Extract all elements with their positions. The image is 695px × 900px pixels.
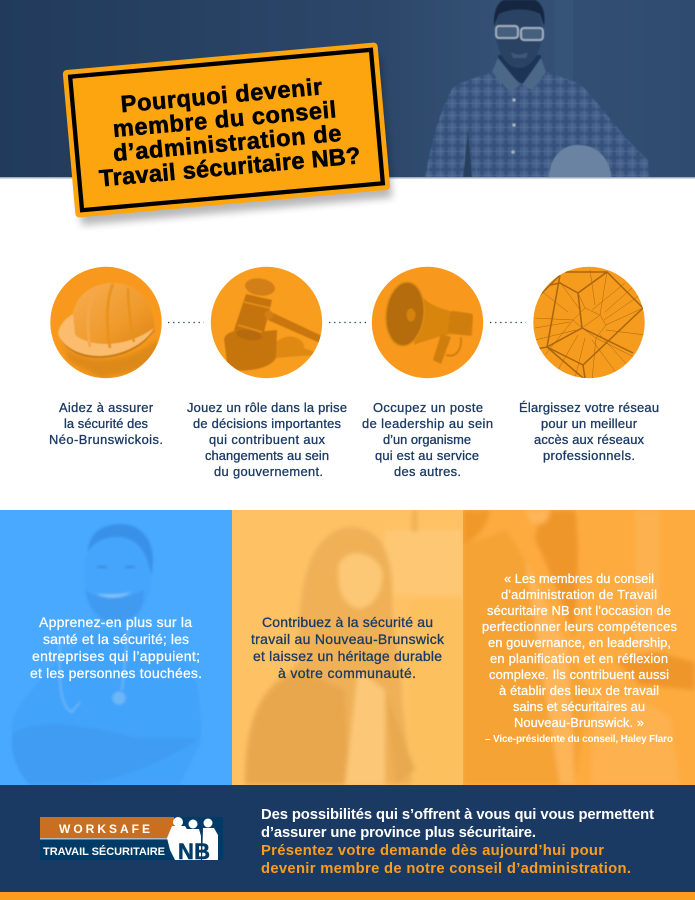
title text	[92, 71, 361, 191]
quote text: en planification et en réflexion	[490, 651, 668, 666]
quote attribution: – Vice-présidente du conseil, Haley Flaro	[485, 734, 673, 745]
quote text: d'administration de Travail	[501, 587, 657, 602]
caption 2	[187, 400, 347, 479]
panel text: santé et la sécurité; les	[43, 631, 189, 647]
caption 3	[362, 400, 493, 479]
caption 2: du gouvernement.	[214, 464, 323, 479]
caption 4: Élargissez votre réseau	[519, 400, 659, 415]
caption 4: accès aux réseaux	[534, 432, 645, 447]
footer message: Des possibilités qui s’offrent à vous qui vous permettent	[261, 807, 654, 823]
footer band	[0, 785, 695, 892]
logo: WorkSafe Travail sécuritaire NB: WORKSAFE	[59, 822, 150, 836]
panel text	[251, 614, 445, 681]
panel text: et laissez un héritage durable	[253, 648, 442, 664]
logo: WorkSafe Travail sécuritaire NB: TRAVAIL SÉCURITAIRE	[43, 845, 165, 858]
benefits row	[49, 267, 659, 479]
title text: d’administration de	[112, 120, 342, 166]
quote text: « Les membres du conseil	[504, 571, 654, 586]
caption 1: Aidez à assurer	[59, 400, 154, 415]
caption 1: la sécurité des	[64, 416, 148, 431]
title text: Travail sécuritaire NB?	[98, 142, 361, 191]
logo: WorkSafe Travail sécuritaire NB	[40, 817, 223, 864]
quote text: Nouveau-Brunswick. »	[514, 715, 644, 730]
caption 1: Néo-Brunswickois.	[49, 432, 163, 447]
title sign	[63, 42, 392, 226]
icon: gavel	[211, 267, 322, 378]
dotted connector 1	[168, 322, 204, 324]
panel text: à votre communauté.	[278, 665, 416, 681]
dotted connector 2	[329, 322, 366, 324]
title text: membre du conseil	[112, 96, 337, 142]
panel text	[30, 614, 202, 681]
quote text: en gouvernance, en leadership,	[488, 635, 671, 650]
caption 3: Occupez un poste	[373, 400, 483, 415]
panel text: travail au Nouveau-Brunswick	[251, 631, 445, 647]
footer message: d’assurer une province plus sécuritaire.	[261, 825, 536, 841]
shadow under header edge	[0, 177, 695, 178]
caption 2: qui contribuent aux	[209, 432, 326, 447]
panel text: Contribuez à la sécurité au	[262, 614, 433, 630]
logo people silhouettes	[167, 817, 218, 860]
bottom orange bar	[0, 892, 695, 900]
caption 2: de décisions importantes	[193, 416, 341, 431]
icon: megaphone	[372, 267, 483, 378]
dotted connector 3	[490, 322, 526, 324]
footer message	[261, 807, 654, 877]
footer message: devenir membre de notre conseil d’administration.	[261, 861, 631, 877]
title text: Pourquoi devenir	[120, 73, 323, 117]
icon: network	[530, 267, 645, 385]
caption 1	[49, 400, 163, 447]
logo: WorkSafe Travail sécuritaire NB: NB	[178, 839, 210, 864]
quote text: perfectionner leurs compétences	[482, 619, 677, 634]
caption 3: de leadership au sein	[362, 416, 493, 431]
quote text: à établir des lieux de travail	[499, 683, 659, 698]
caption 4	[519, 400, 659, 463]
icon: hard hat	[50, 267, 162, 378]
photo: smiling man	[12, 524, 201, 785]
footer message: Présentez votre demande dès aujourd’hui pour	[261, 843, 604, 859]
caption 4: professionnels.	[543, 448, 635, 463]
panel: yellow contribute	[232, 510, 463, 785]
quote text	[482, 571, 677, 745]
panel: orange quote	[463, 510, 695, 785]
caption 4: pour un meilleur	[541, 416, 638, 431]
caption 2: changements au sein	[205, 448, 329, 463]
panel text: et les personnes touchées.	[30, 665, 202, 681]
quote text: sains et sécuritaires au	[513, 699, 645, 714]
photo: handshake	[463, 510, 695, 785]
panel text: entreprises qui l’appuient;	[32, 648, 200, 664]
photo: smiling woman	[245, 510, 463, 785]
caption 3: des autres.	[394, 464, 461, 479]
header banner with photo	[0, 0, 695, 178]
panel: blue learn more	[0, 510, 232, 785]
caption 3: qui est au service	[375, 448, 479, 463]
caption 3: d’un organisme	[383, 432, 471, 447]
quote text: complexe. Ils contribuent aussi	[489, 667, 669, 682]
panel text: Apprenez-en plus sur la	[39, 614, 192, 630]
photo: man with hard hat	[425, 0, 649, 178]
caption 2: Jouez un rôle dans la prise	[187, 400, 347, 415]
quote text: sécuritaire NB ont l'occasion de	[487, 603, 671, 618]
